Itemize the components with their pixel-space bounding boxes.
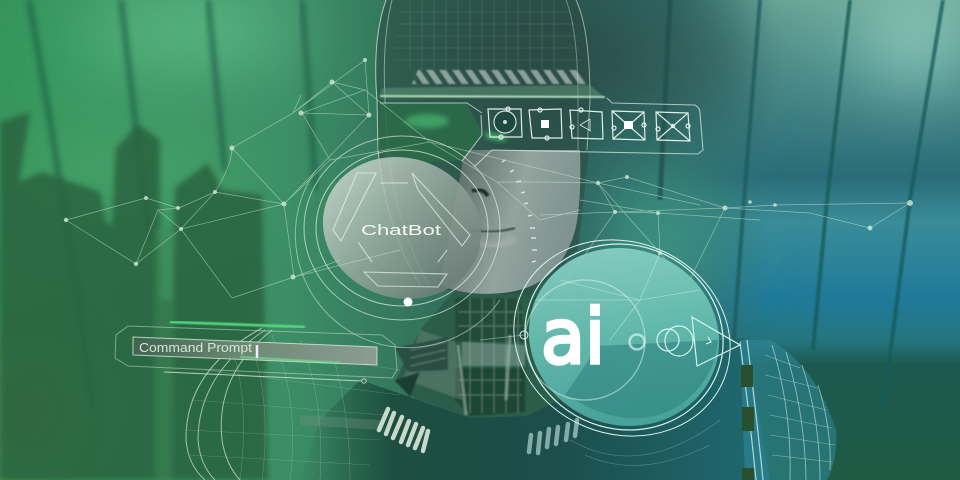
network nodes [64,58,913,280]
eye glow [405,114,505,139]
robot right shoulder wireframe [740,340,836,480]
icon: target lens [488,107,522,139]
robot face [378,103,580,294]
face tick marks [502,160,537,262]
robot head visor stripes [380,70,605,98]
network lines [66,60,910,300]
icon: filled square [529,108,562,140]
ai lens circle [480,208,760,468]
robot left shoulder wireframe [186,328,400,480]
icon: cross square [612,111,646,140]
neck mechanical detail [395,298,525,416]
springs [379,409,577,453]
ai glyph diagram [657,317,740,366]
background: city skyline silhouettes [0,112,268,480]
command prompt bar [115,322,397,383]
ai label: ai [541,292,605,381]
chatbot label: ChatBot [361,223,441,239]
chatbot rings [295,136,500,348]
robot head wireframe [376,0,590,295]
prompt label: Command Prompt [139,341,253,355]
icon: node triangle [570,108,603,139]
chatbot lens circle [295,136,500,348]
icon: cross diagonal [656,112,690,141]
ai rings [480,208,760,468]
chatbot node [404,298,412,306]
HUD icon panel [380,98,703,167]
robot torso [300,290,770,480]
